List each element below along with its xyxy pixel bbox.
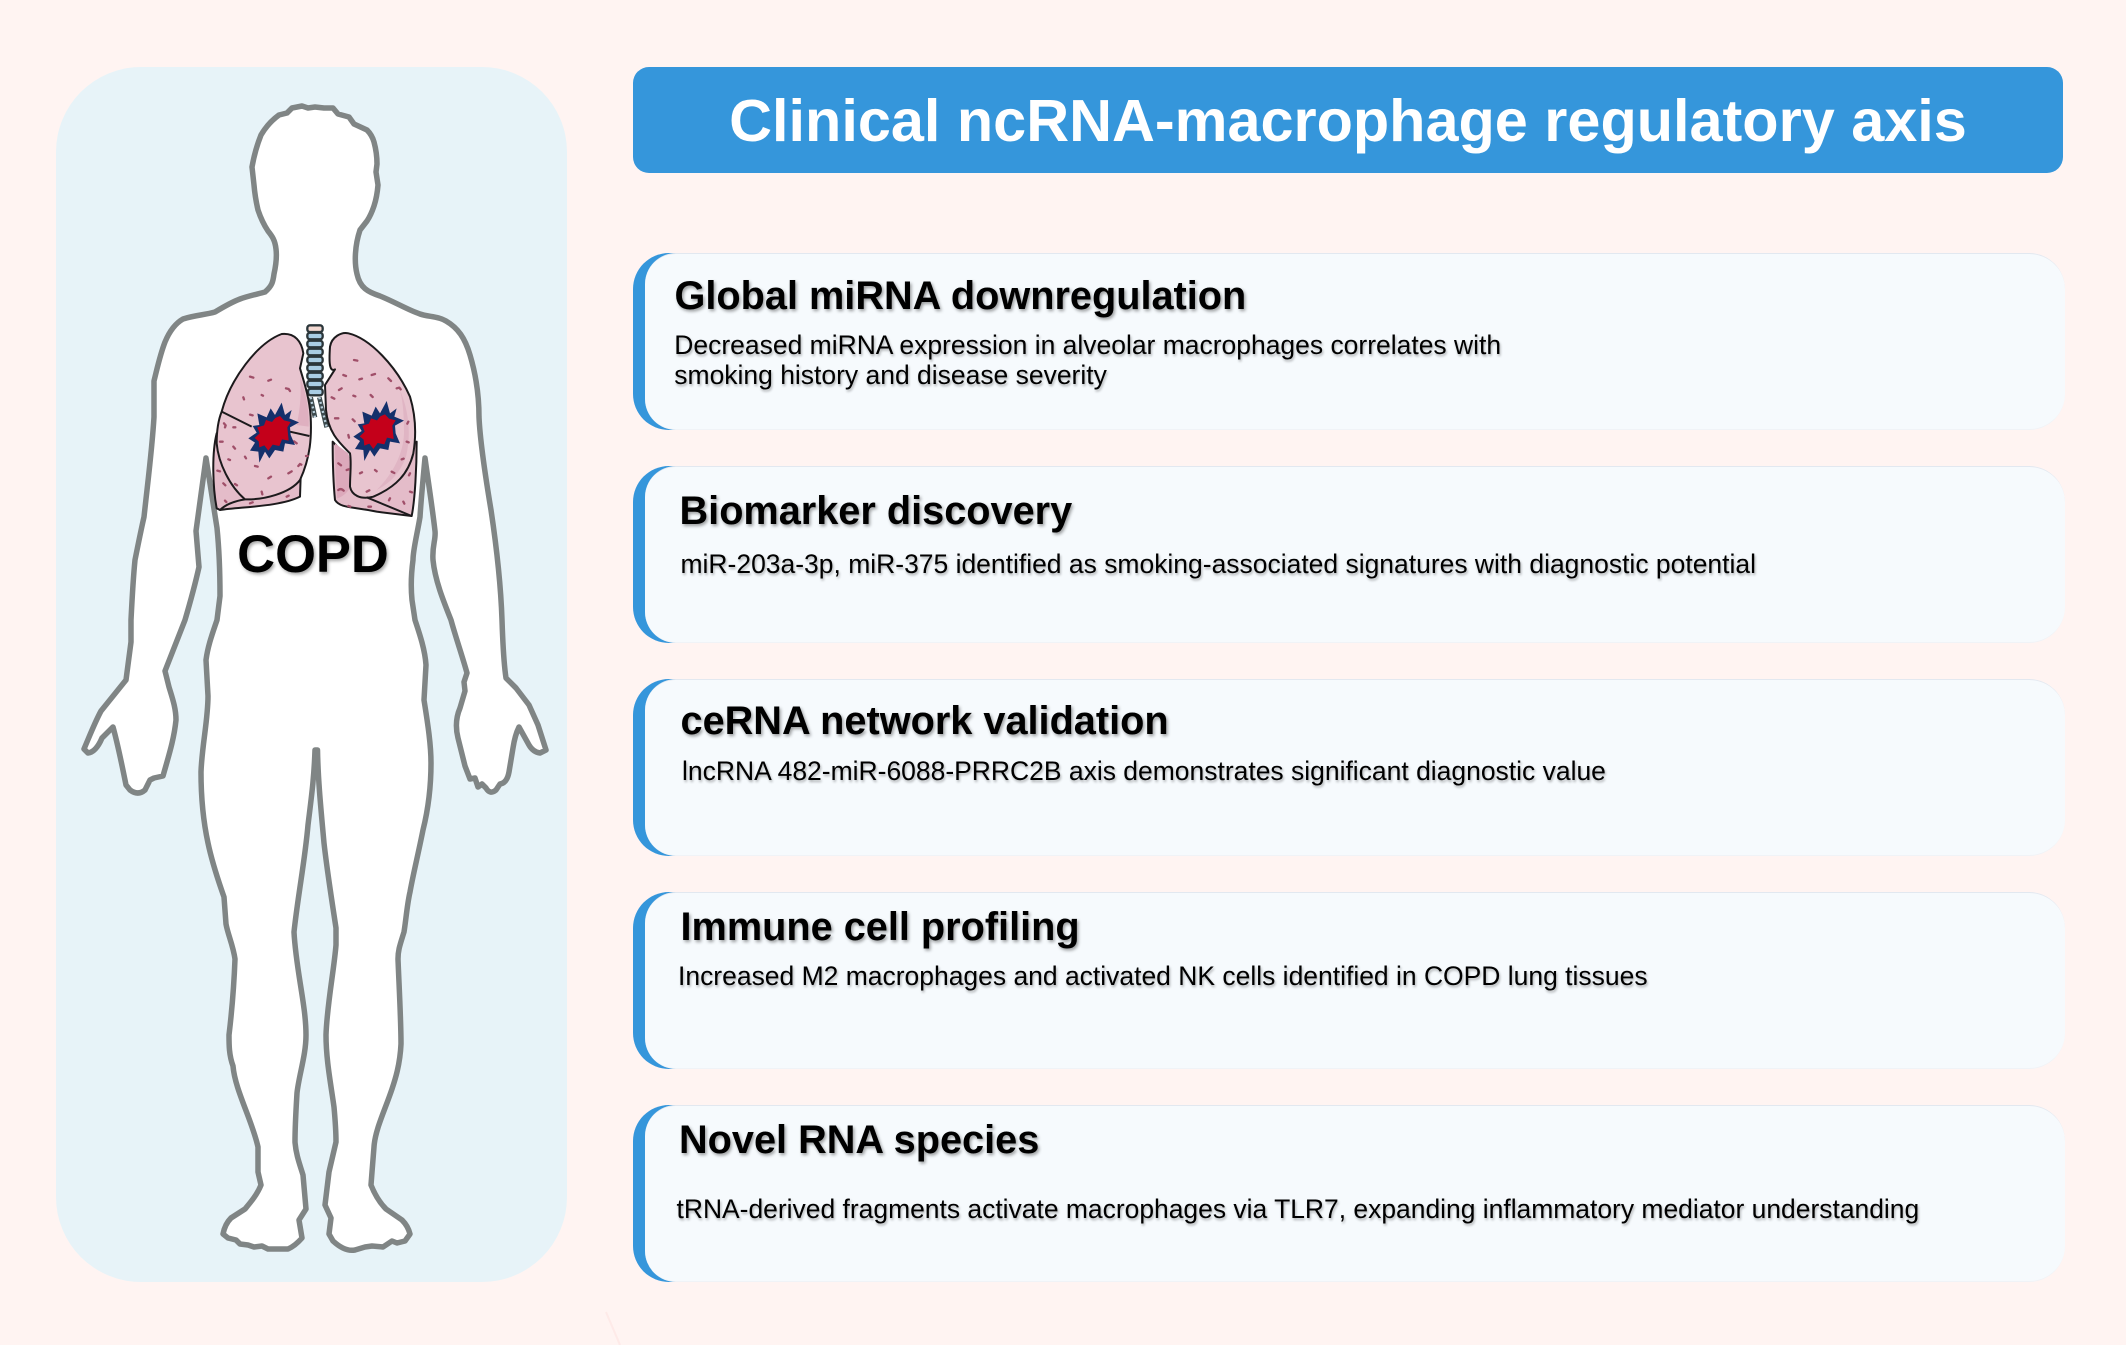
label: COPD: COPD — [237, 525, 389, 584]
left lung — [213, 334, 311, 510]
heading: ceRNA network validation: ceRNA network validation — [680, 699, 1169, 743]
title banner: Clinical ncRNA-macrophage regulatory axis — [729, 87, 1967, 154]
body outline — [84, 106, 546, 1250]
text: biomarker discovery: miR-203a-3p, miR-375 identified as smoking-associated signatures with diagnostic potential — [680, 549, 1756, 579]
card: novel RNA species — [633, 1105, 2065, 1282]
title banner — [633, 67, 2063, 173]
right lung — [325, 333, 417, 516]
tumour burst: right lung — [353, 401, 404, 461]
panel: body figure background — [56, 67, 567, 1282]
text: global miRNA downregulation: smoking history and disease severity — [674, 360, 1107, 390]
lung tissue specks — [217, 360, 412, 507]
faint stray mark — [606, 1312, 620, 1345]
text: novel RNA species: tRNA-derived fragments activate macrophages via TLR7, expanding inflammatory mediator understanding — [676, 1194, 1919, 1224]
card: biomarker discovery — [633, 466, 2065, 643]
heading: novel RNA species: Novel RNA species — [679, 1118, 1039, 1162]
heading: global miRNA downregulation: Global miRNA downregulation — [674, 274, 1246, 318]
tumour burst: left lung — [248, 403, 299, 463]
card: global miRNA downregulation — [633, 253, 2065, 430]
text: immune cell profiling: Increased M2 macrophages and activated NK cells identified in COPD lung tissues — [678, 961, 1648, 991]
heading: biomarker discovery: Biomarker discovery — [680, 489, 1072, 533]
text: ceRNA network validation: lncRNA 482-miR-6088-PRRC2B axis demonstrates significant diagnostic value — [682, 756, 1606, 786]
text: global miRNA downregulation — [674, 330, 1502, 393]
lungs — [213, 325, 417, 516]
card: ceRNA network validation — [633, 679, 2065, 856]
trachea and bronchi — [307, 325, 327, 427]
heading: immune cell profiling: Immune cell profiling — [680, 905, 1080, 949]
text: global miRNA downregulation: Decreased miRNA expression in alveolar macrophages correlates with — [674, 330, 1501, 360]
card: immune cell profiling — [633, 892, 2065, 1069]
